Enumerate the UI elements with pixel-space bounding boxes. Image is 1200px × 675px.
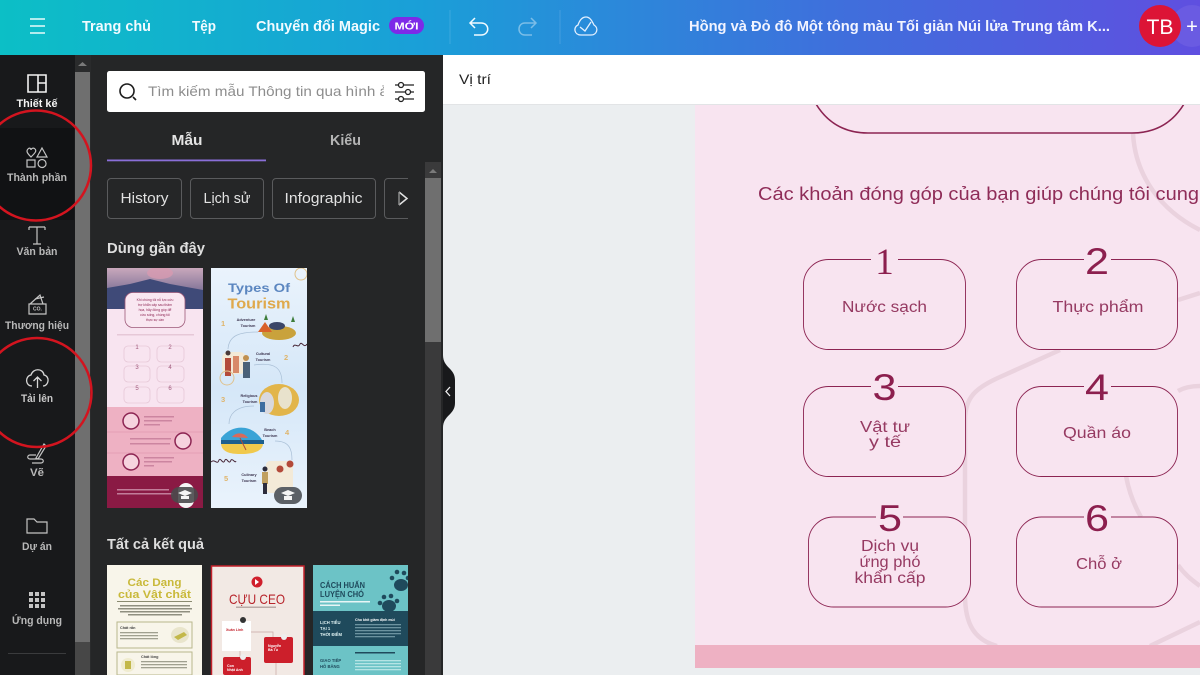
illustration: religious [259,384,299,416]
template thumbnail: types of tourism: Tourism [242,479,257,483]
pink bottom band [695,645,1200,668]
avatar: TB [1146,16,1174,39]
thumbnail title: Types Of [228,283,290,295]
rail item: design [16,75,58,110]
card 4: clothing: Quần áo [1063,425,1131,442]
search box: Tìm kiếm mẫu Thông tin qua hình ả [148,83,388,99]
chip: next arrow [384,178,408,218]
card 6: shelter: Chỗ ở [1076,556,1122,573]
icon: redo [519,18,536,35]
badge: new: MỚI [394,20,419,32]
panel scrollbar [425,162,441,675]
template thumbnail: states of matter: Các Dạng [128,577,182,589]
heading: all results: Tất cả kết quả [107,537,205,553]
document title: Hồng và Đỏ đô Một tông màu Tối giản Núi lửa Trung tâm K... [689,18,1110,35]
card 2: food [1016,241,1178,350]
template thumbnail: former CEO: Nhật Anh [227,668,243,672]
rail item: brand: CO. [33,306,43,312]
template thumbnail: states of matter: Chất lỏng [141,655,159,659]
template thumbnail: volcano donation: 5 [135,386,139,392]
top navigation bar [0,0,1200,55]
card 6: shelter: 6 [1085,498,1109,539]
nav: magic switch: Chuyển đổi Magic [256,18,380,35]
top text frame [816,104,1184,133]
template thumbnail: states of matter: Chất rắn [120,625,136,630]
nav: home: Trang chủ [82,18,151,35]
template thumbnail: dog training: LUYỆN CHÓ [320,590,364,599]
template thumbnail: volcano donation: 3 [135,365,139,371]
template thumbnail: dog training: GIAO TIẾP [320,658,341,663]
card 5: emergency response: Dịch vụ [861,538,919,555]
tab: styles: Kiểu [330,133,361,149]
rail item: text: Văn bản [16,246,58,258]
rail item: projects [22,519,52,553]
template thumbnail: former CEO: Bá Tú [268,648,278,652]
template thumbnail: states of matter [107,565,202,675]
decorative background lines [965,133,1200,646]
template thumbnail: dog training: CÁCH HUẤN [320,580,365,590]
template thumbnail: former CEO: CỰU CEO [229,591,285,607]
icon: cloud saved [575,17,597,35]
template thumbnail: volcano donation: 4 [168,365,172,371]
card 3: medical supplies: Vật tư [860,419,910,436]
template thumbnail: volcano donation: 1 [135,345,139,351]
card 3: medical supplies: 3 [872,367,896,408]
template thumbnail: types of tourism: Tourism [263,434,278,438]
illustration: beach [221,428,264,454]
badge: learning hat [171,487,198,503]
nav: file: Tệp [192,18,216,35]
illustration: map pins [262,460,294,494]
card 5: emergency response [808,498,970,607]
panel collapse handle [443,355,455,428]
design page [695,104,1200,668]
annotation: red circle around elements [0,110,91,220]
template thumbnail: types of tourism: Religious [240,394,258,398]
template thumbnail: volcano donation: thực sự cần [146,318,164,322]
rail item: apps [12,592,62,627]
card 2: food: 2 [1085,241,1109,282]
template thumbnail: types of tourism: Tourism [256,358,271,362]
add member button: + [1186,16,1198,38]
template thumbnail: types of tourism: 2 [284,353,288,362]
card 5: emergency response: 5 [878,498,902,539]
template thumbnail: types of tourism: Tourism [243,400,258,404]
rail item: draw [28,444,46,479]
icon: magnifier [120,84,136,100]
rail item: apps: Ứng dụng [12,614,62,627]
position toolbar: Vị trí [459,71,491,87]
badge: new [389,17,424,34]
card 1: clean water [804,242,966,350]
chip: history vietnamese [190,178,264,218]
card 5: emergency response: ứng phó [860,554,920,571]
template thumbnail: types of tourism: 1 [221,319,225,328]
card 1: clean water: 1 [875,242,894,283]
badge: learning hat [274,487,302,504]
template thumbnail: types of tourism: Beach [264,428,276,432]
chip: infographic: Infographic [284,190,363,207]
template thumbnail: types of tourism: Cultural [256,352,270,356]
chip: infographic [272,178,376,218]
rail item: brand: Thương hiệu [5,320,69,332]
search box [107,71,425,112]
rail item: elements: Thành phần [7,172,67,184]
annotation: red circle around upload [0,338,92,447]
template thumbnail: types of tourism: 3 [221,395,225,404]
template thumbnail: former CEO: Con [227,664,234,668]
template thumbnail: former CEO: Xuân Linh [226,628,243,632]
icon: paw prints [378,570,410,612]
template thumbnail: dog training: LỊCH TIỂU [320,620,340,625]
template thumbnail: volcano donation: 2 [168,345,172,351]
template thumbnail: types of tourism: Culinary [241,473,257,477]
template thumbnail: types of tourism [211,268,307,508]
template thumbnail: volcano donation: trợ khẩn cấp sau thảm [138,303,172,307]
intro sentence: Các khoản đóng góp của bạn giúp chúng tôi cung [758,184,1199,204]
chip: history vietnamese: Lịch sử [204,190,250,207]
template thumbnail: types of tourism: 5 [224,474,228,483]
template thumbnail: dog training: THỜI ĐIỂM [320,632,342,637]
rail item: design: Thiết kế [16,98,58,110]
avatar [1139,5,1181,47]
add member button [1171,5,1200,47]
rail item: elements [7,148,67,184]
template thumbnail: dog training: HÔ BẰNG [320,664,340,669]
card 2: food: Thực phẩm [1052,299,1144,316]
position toolbar [443,55,1200,105]
heading: recently used: Dùng gần đây [107,241,205,257]
left icon rail [0,55,75,675]
rail item: projects: Dự án [22,541,52,553]
rail item: upload: Tải lên [21,393,53,405]
card 5: emergency response: khẩn cấp [854,570,926,587]
card 1: clean water: Nước sạch [842,299,927,316]
icon: filter sliders [395,82,414,102]
tab: templates: Mẫu [172,132,202,149]
template thumbnail: volcano donation: Khi chúng tôi nỗ lực cứu [137,297,173,302]
template thumbnail: dog training: TẠI 1 [320,626,331,631]
template thumbnail: types of tourism: 4 [285,428,290,437]
template thumbnail: volcano donation: cứu sống, chúng tôi [140,313,170,317]
card 4: clothing [1016,367,1178,476]
icon: undo [470,18,488,35]
template thumbnail: types of tourism: Adventure [237,318,255,322]
template thumbnail: states of matter: của Vật chất [118,589,191,601]
illustration: adventure [258,314,296,340]
template thumbnail: former CEO: Nguyễn [268,644,281,648]
template thumbnail: volcano donation: họa, hãy đóng góp để [139,308,172,312]
template thumbnail: volcano donation [107,267,203,508]
icon: hamburger menu [30,19,45,33]
card 4: clothing: 4 [1085,367,1109,408]
card 6: shelter [1016,498,1178,607]
rail item: brand [5,295,69,332]
template thumbnail: volcano donation: 6 [168,386,172,392]
template thumbnail: former CEO [212,566,304,675]
card 3: medical supplies [804,367,966,476]
template thumbnail: dog training: Cho khít giám định mùi [355,618,395,622]
card 3: medical supplies: y tế [869,434,901,451]
canvas workspace background [443,55,1200,675]
template thumbnail: types of tourism: Tourism [228,296,290,312]
rail item: draw: Vẽ [30,467,44,479]
rail item: text [16,227,58,258]
chip: history: History [120,190,169,207]
rail item: upload [21,370,53,405]
illustration: cultural group [220,350,250,385]
side panel [91,55,443,675]
template thumbnail: dog training [313,565,410,675]
chip: history [108,178,182,218]
rail scrollbar [75,55,91,675]
template thumbnail: types of tourism: Tourism [241,324,256,328]
